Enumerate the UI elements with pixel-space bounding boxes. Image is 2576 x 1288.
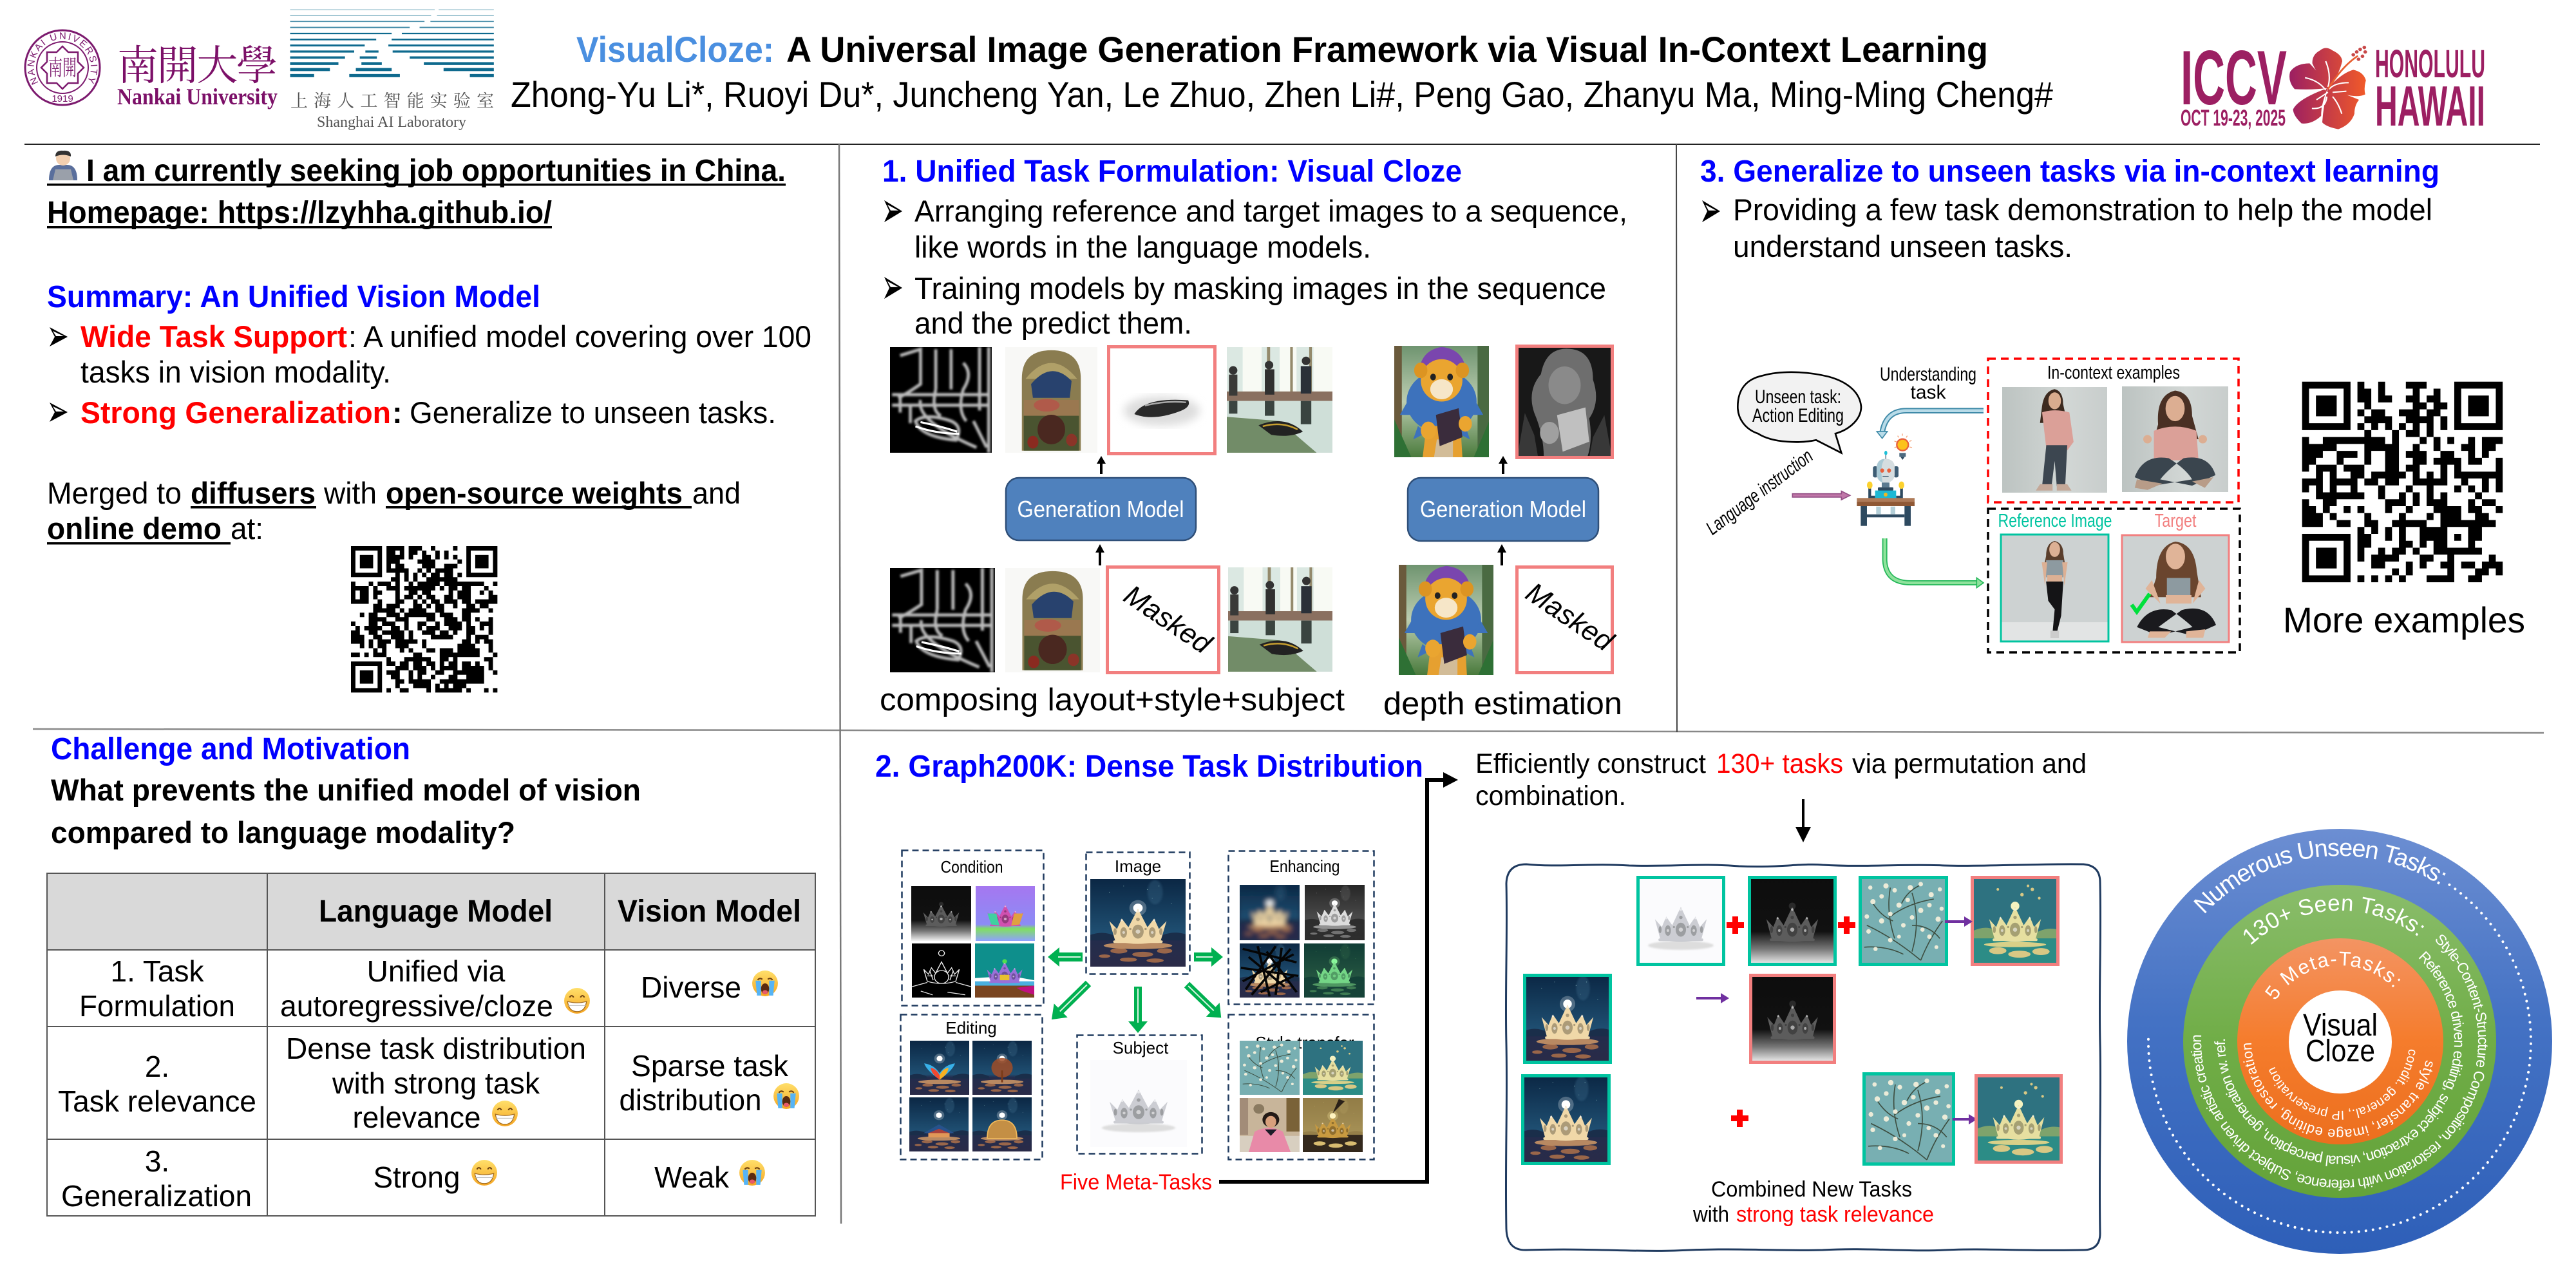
text: wide task support bullet: Wide Task Support — [80, 319, 347, 354]
text: combined new tasks: strong task relevance — [1736, 1202, 1934, 1227]
ring: seen tasks: Reference driven editing, subject extraction, visual perception, generation w. ref. — [2214, 951, 2464, 1166]
text: first bullet: Arranging reference and target images to a sequence, — [914, 194, 1627, 228]
panel: combined new tasks — [1506, 864, 2101, 1251]
generation model box right: Generation Model — [1420, 496, 1586, 522]
icon: examples QR code — [2302, 385, 2503, 579]
icon: robot at desk — [1857, 451, 1915, 526]
text: merged to diffusers: at: — [231, 511, 263, 545]
image row: composing input — [890, 567, 1332, 672]
text: wide task support bullet: tasks in vision modality. — [80, 355, 391, 389]
row: image to depth — [1524, 975, 1835, 1063]
text: strong generalization bullet: Strong Generalization — [80, 395, 391, 430]
text: merged to diffusers: open-source weights — [386, 476, 683, 510]
text: job seeking notice: I am currently seeking job opportunities in China. — [86, 154, 786, 188]
icon: Nankai seal — [24, 30, 100, 106]
icon: Nankai seal: 南開 — [48, 56, 77, 80]
text: merged to diffusers: Merged to — [47, 476, 182, 510]
text: five meta-tasks: Five Meta-Tasks — [1060, 1170, 1212, 1195]
diagram: in-context learning — [1702, 359, 2240, 652]
heading: section 1: 1. Unified Task Formulation: Visual Cloze — [882, 155, 1462, 189]
text: conference dates: OCT 19-23, 2025 — [2181, 106, 2286, 131]
meta-task: subject: Subject — [1113, 1038, 1169, 1057]
text: strong generalization bullet: : — [392, 395, 402, 430]
table: language vs vision: Formulation — [79, 989, 235, 1023]
logo: Shanghai AI Laboratory — [290, 10, 494, 131]
icon: Shanghai AI Lab stripes — [290, 10, 494, 75]
generation model box left: Generation Model — [1018, 496, 1184, 522]
icon: technologist emoji — [49, 151, 77, 180]
meta-task: condition — [902, 850, 1043, 1006]
table: language vs vision: Unified via — [367, 954, 506, 988]
image pair: depth input: Masked — [1520, 576, 1620, 658]
core: Visual Cloze — [2289, 990, 2392, 1094]
text: question: compared to language modality? — [51, 815, 515, 849]
panel: summary — [47, 151, 811, 690]
text: bullet: understand unseen tasks. — [1733, 229, 2072, 263]
text: wide task support bullet — [50, 319, 811, 389]
arrow: down — [1795, 799, 1811, 842]
table: language vs vision: Weak — [654, 1160, 730, 1194]
table: language vs vision — [47, 873, 815, 1216]
text: merged to diffusers — [47, 476, 741, 545]
ring: seen tasks: Style-Content-Structure Composition, restoration with reference, Subject driven artistic creation — [2191, 934, 2488, 1191]
heading: section 2: 2. Graph200K: Dense Task Distribution — [875, 750, 1423, 784]
caption: composing: composing layout+style+subject — [880, 683, 1345, 717]
icon: light bulb — [1895, 433, 1912, 460]
image pair: depth output — [1394, 346, 1613, 457]
icon: hibiscus flower — [2289, 46, 2367, 129]
text: construct tasks: 130+ tasks — [1716, 748, 1843, 779]
image row: composing output — [890, 346, 1332, 453]
icon: check mark — [2132, 594, 2150, 612]
text: strong generalization bullet: Generalize to unseen tasks. — [410, 395, 776, 430]
arrows: model flow — [1095, 456, 1508, 565]
box: in-context examples: In-context examples — [2047, 363, 2180, 383]
text: merged to diffusers: diffusers — [191, 476, 316, 510]
table: language vs vision: Language Model — [319, 895, 553, 929]
table: language vs vision: Diverse — [641, 971, 741, 1004]
title: A Universal Image Generation Framework via Visual In-Context Learning — [786, 29, 1988, 70]
core: Visual Cloze: Visual — [2303, 1009, 2378, 1043]
core: Visual Cloze: Cloze — [2306, 1034, 2375, 1068]
generation model box left — [1006, 478, 1196, 540]
box: reference and target: Reference Image — [1998, 511, 2112, 531]
text: bullet — [1702, 193, 2432, 263]
text: Nankai University: Nankai University — [117, 84, 278, 109]
table: language vs vision: with strong task — [332, 1066, 540, 1100]
text: homepage: Homepage: https://lzyhha.github.io/ — [47, 196, 552, 230]
text: language instruction: Language instruction — [1702, 446, 1817, 539]
icon: demo QR code — [351, 548, 497, 690]
table: language vs vision: Vision Model — [618, 895, 801, 929]
ring: unseen tasks — [2127, 829, 2552, 1254]
ring: seen tasks: 130+ Seen Tasks: — [2244, 896, 2424, 945]
generation model box right — [1408, 478, 1598, 541]
table: language vs vision: 2. — [145, 1050, 169, 1083]
table: language vs vision: relevance — [353, 1101, 480, 1134]
arrow: meta-tasks to construction — [1219, 772, 1458, 1182]
speech bubble: Unseen task: — [1755, 386, 1841, 408]
text: second bullet: Training models by masking images in the sequence — [914, 271, 1606, 305]
text: construct tasks: combination. — [1475, 781, 1626, 811]
speech bubble: Action Editing — [1752, 405, 1844, 426]
arrow: output — [1885, 538, 1984, 588]
logo: ICCV Honolulu Hawaii — [2181, 35, 2485, 138]
meta-task: style transfer — [1229, 1015, 1374, 1159]
text: ICCV: ICCV — [2181, 35, 2287, 121]
text: merged to diffusers: with — [323, 476, 377, 510]
text: construct tasks: via permutation and — [1852, 748, 2087, 779]
text: combined new tasks: with — [1692, 1202, 1729, 1227]
text: question: What prevents the unified model of vision — [51, 773, 641, 807]
panel: unified task formulation — [880, 155, 1627, 721]
text: Shanghai lab Chinese name: 上海人工智能实验室 — [290, 91, 494, 111]
row: image plus style — [1522, 1074, 2061, 1164]
text: combined new tasks: Combined New Tasks — [1711, 1177, 1912, 1202]
arrows: image to meta-tasks — [1045, 947, 1228, 1033]
table: language vs vision: Generalization — [61, 1179, 252, 1213]
image pair: depth input — [1399, 565, 1620, 675]
ring: meta-tasks: condit. general., IP preservation — [2269, 1050, 2415, 1120]
box: reference and target — [1988, 509, 2240, 652]
heading: section 3: 3. Generalize to unseen tasks via in-context learning — [1700, 155, 2439, 189]
table: language vs vision: Task relevance — [58, 1084, 256, 1118]
text: understanding task: Understanding — [1880, 364, 1976, 385]
text: merged to diffusers: online demo — [47, 511, 222, 545]
text: question — [51, 773, 641, 849]
meta-task: enhancing — [1229, 851, 1374, 1005]
text: second bullet — [884, 271, 1606, 340]
image row: composing input: Masked — [1118, 579, 1218, 661]
text: first bullet — [884, 194, 1627, 264]
panel: challenge and motivation — [47, 732, 815, 1216]
text: combined new tasks — [1692, 1177, 1934, 1227]
ring: meta-tasks: style transfer, image editing, restoration — [2243, 1043, 2433, 1137]
meta-task: editing: Editing — [945, 1018, 997, 1037]
text: Nankai calligraphy: 南開大學 — [117, 43, 278, 89]
text: construct tasks: Efficiently construct — [1475, 748, 1706, 779]
table: language vs vision: Dense task distribution — [286, 1032, 586, 1065]
row: subject depth style — [1638, 877, 2058, 965]
caption: depth estimation: depth estimation — [1383, 687, 1622, 721]
text: bullet: Providing a few task demonstration to help the model — [1733, 193, 2432, 227]
ring: meta-tasks — [2237, 938, 2443, 1144]
text: understanding task: task — [1910, 382, 1947, 403]
heading: summary: Summary: An Unified Vision Model — [47, 280, 540, 314]
meta-task: image: Image — [1115, 857, 1161, 876]
arrow: understanding task — [1877, 411, 1984, 439]
text: wide task support bullet: : A unified model covering over 100 — [348, 319, 811, 354]
text: second bullet: and the predict them. — [914, 306, 1192, 340]
text: Shanghai AI Laboratory: Shanghai AI Laboratory — [317, 114, 466, 131]
table: language vs vision: 1. Task — [111, 954, 204, 988]
table: language vs vision: distribution — [620, 1083, 761, 1117]
icon: Nankai seal: 1919 — [52, 93, 73, 104]
heading: challenge: Challenge and Motivation — [51, 732, 410, 766]
meta-task: subject — [1077, 1036, 1202, 1154]
text: Hawaii: HAWAII — [2375, 74, 2485, 138]
ring: meta-tasks: 5 Meta-Tasks: — [2265, 952, 2401, 999]
table: language vs vision: 3. — [145, 1144, 169, 1178]
text: strong generalization bullet — [50, 395, 776, 430]
meta-task: condition: Condition — [940, 857, 1003, 876]
text: merged to diffusers: and — [692, 476, 741, 510]
box: in-context examples — [1988, 359, 2239, 502]
text: more examples: More examples — [2283, 600, 2525, 640]
meta-task: editing — [900, 1015, 1042, 1159]
panel: Graph200K — [875, 748, 2101, 1251]
logo: Nankai University — [24, 30, 278, 109]
chart: concentric task circles — [2127, 829, 2552, 1254]
text: first bullet: like words in the language models. — [914, 230, 1371, 264]
text: construct tasks — [1475, 748, 2087, 811]
table: language vs vision: Sparse task — [631, 1049, 789, 1083]
title: VisualCloze: — [576, 29, 774, 70]
panel: generalize to unseen tasks — [1700, 155, 2525, 652]
meta-task: style transfer: Style transfer — [1255, 1033, 1354, 1052]
text: understanding task — [1880, 364, 1976, 403]
meta-task: enhancing: Enhancing — [1270, 857, 1340, 876]
icon: Nankai seal: NANKAI UNIVERSITY — [27, 32, 98, 85]
table: language vs vision: Strong — [374, 1160, 460, 1194]
authors: Zhong-Yu Li*, Ruoyi Du*, Juncheng Yan, Le Zhuo, Zhen Li#, Peng Gao, Zhanyu Ma, Ming-Ming Cheng# — [511, 74, 2053, 115]
meta-task: image — [1086, 853, 1190, 974]
box: reference and target: Target — [2155, 511, 2196, 531]
arrow: language instruction — [1792, 491, 1850, 500]
table: language vs vision: autoregressive/cloze — [280, 989, 553, 1023]
ring: unseen tasks: Numerous Unseen Tasks: — [2193, 841, 2446, 913]
speech bubble — [1738, 372, 1861, 453]
